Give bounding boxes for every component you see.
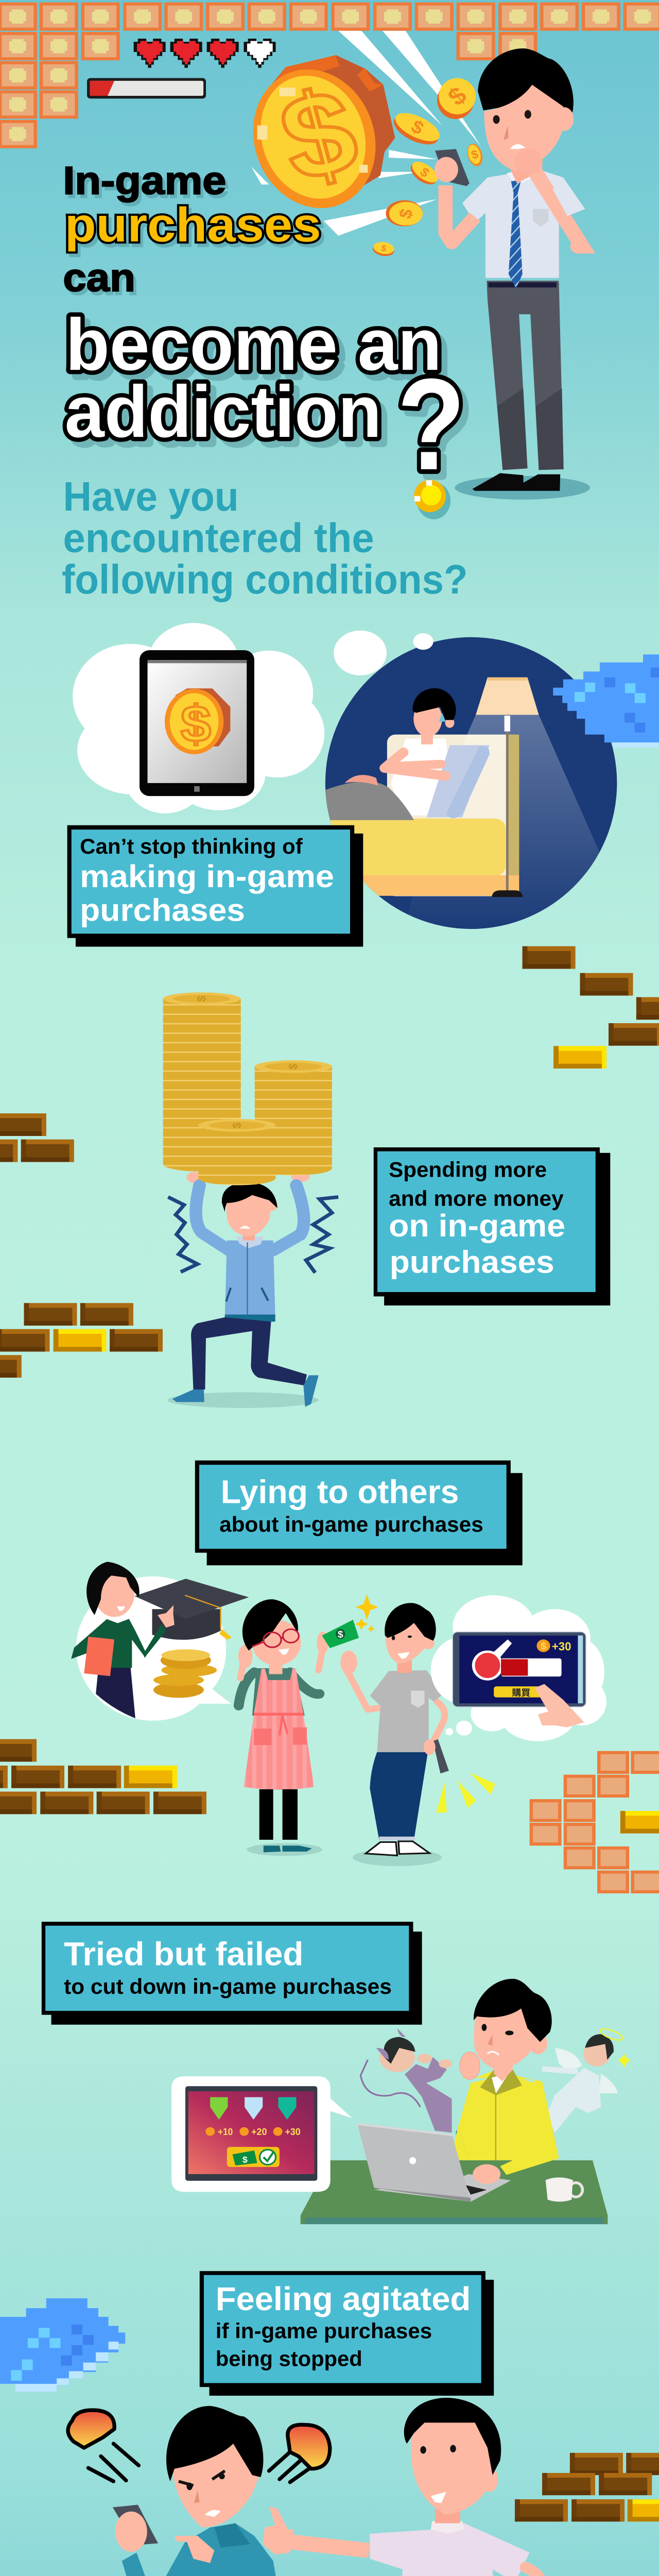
shadow [247, 1843, 322, 1856]
torso [225, 1241, 275, 1317]
chair back [456, 2131, 552, 2162]
icon: tablet with coin [140, 650, 254, 796]
phone [435, 149, 470, 186]
subtitle: Have you [63, 474, 239, 519]
arm to mouth [534, 170, 582, 246]
progress bar [501, 1658, 562, 1676]
floor shadow [167, 1392, 319, 1408]
sleeve [552, 177, 585, 216]
caption 5 [200, 2271, 494, 2396]
nose [504, 125, 509, 140]
icon: life bar [87, 78, 206, 98]
tee [370, 1670, 443, 1753]
belt [489, 282, 557, 287]
angel body [546, 2067, 601, 2133]
neck [509, 156, 542, 183]
section 1: can't stop thinking [0, 623, 659, 1162]
tie [509, 180, 523, 289]
icon: big pixel coin [237, 55, 395, 221]
coin 4 [407, 158, 442, 189]
eyes [392, 1635, 395, 1640]
angel sparkles [618, 2054, 630, 2067]
caption 1: making in-game [80, 859, 334, 894]
jacket cuff [500, 2143, 559, 2175]
mouth [431, 2492, 446, 2503]
apron [244, 1669, 314, 1790]
coin 5: $ [395, 207, 417, 221]
caption 5: Feeling agitated [216, 2281, 471, 2317]
desk [301, 2160, 608, 2224]
pockets [226, 1287, 268, 1301]
brows and eyes [179, 2471, 225, 2485]
apron tie [254, 1713, 303, 1716]
man hair [413, 688, 456, 720]
phone [113, 2505, 158, 2545]
teacher face [94, 1570, 134, 1617]
nose [488, 2034, 493, 2046]
collar [235, 1236, 264, 1248]
coin 3 [465, 142, 485, 168]
zip [495, 2093, 496, 2160]
top [252, 1668, 305, 1716]
character: angry son [113, 2406, 283, 2576]
caption 1 [67, 825, 363, 947]
sofa back [387, 735, 519, 896]
section 2: spending more [0, 992, 659, 1893]
section 5: feeling agitated and debts [0, 2398, 659, 2576]
jeans [370, 1752, 428, 1840]
game tablet: 購買 [512, 1688, 530, 1698]
coin 6: $ [380, 243, 387, 253]
trousers [487, 281, 564, 470]
icon: blue pixel cloud left [0, 2298, 125, 2392]
shoes [172, 1375, 319, 1407]
pockets [254, 1728, 271, 1745]
mouth [510, 144, 525, 149]
confirm button [227, 2147, 280, 2167]
game tablet [453, 1632, 586, 1707]
devil horn [376, 2028, 406, 2060]
hands [186, 1172, 202, 1183]
title line: addiction: addiction [65, 371, 381, 453]
ear [529, 2032, 547, 2054]
caption 4: to cut down in-game purchases [64, 1975, 392, 1999]
stack left [163, 992, 241, 1172]
sofa seat [324, 819, 506, 876]
caption 2: and more money [389, 1187, 564, 1211]
title [63, 158, 465, 497]
bricks right bottom [515, 2453, 659, 2521]
title line: purchases: purchases [65, 198, 321, 252]
angel hair [585, 2034, 614, 2060]
lamp shade [476, 677, 539, 715]
cuffs [379, 1837, 397, 1840]
hem [225, 1315, 275, 1321]
sweat [439, 713, 445, 722]
bricks right upper [523, 946, 659, 1069]
coin pile [153, 1649, 217, 1698]
coin 2 [389, 107, 444, 150]
mouth [205, 2510, 221, 2517]
shoes [473, 473, 560, 491]
coin 6 [372, 241, 395, 258]
face [172, 2427, 261, 2528]
character: angry parent [263, 2398, 541, 2576]
icon: dollar bill: $ [338, 1630, 343, 1640]
blocks right [530, 1751, 659, 1893]
hair [404, 2398, 501, 2475]
near arm [445, 185, 475, 243]
smile [397, 1652, 410, 1659]
caption 2: Spending more [389, 1158, 547, 1182]
bricks left middle [0, 1303, 163, 1378]
neck [397, 1656, 412, 1673]
caption 4 [42, 1922, 422, 2025]
teacher hand [158, 1605, 175, 1628]
hand on phone [435, 157, 458, 182]
devil hands [417, 2054, 432, 2063]
subtitle [62, 474, 468, 602]
chin hand [460, 2052, 480, 2079]
halo [599, 2027, 624, 2042]
subtitle: following conditions? [62, 557, 468, 602]
shoes [264, 1845, 312, 1852]
coin 5 [386, 200, 423, 226]
hoodie [122, 2523, 283, 2576]
devil [360, 2028, 452, 2133]
screen [188, 2091, 315, 2174]
caption 3: Lying to others [221, 1473, 459, 1511]
pointing hand [263, 2506, 294, 2555]
game tablet: +30 [552, 1640, 571, 1653]
icon: sparkles [355, 1595, 378, 1632]
game tablet: $ [541, 1641, 546, 1652]
book [84, 1637, 114, 1676]
stack right [255, 1060, 332, 1175]
lower arm [431, 1702, 445, 1747]
sofa base [363, 875, 519, 896]
hand phone [115, 2512, 147, 2552]
blanket [326, 782, 414, 820]
coin rewards [205, 2127, 301, 2138]
bubble [171, 2076, 352, 2192]
caption 4: Tried but failed [64, 1936, 303, 1973]
small thought bubbles [334, 631, 433, 675]
eyes [493, 115, 500, 124]
strain lines [168, 1197, 338, 1273]
face [252, 1620, 301, 1666]
legs [259, 1789, 273, 1840]
man in yellow jacket [449, 1979, 559, 2175]
dark circle scene [324, 637, 617, 934]
mouth [488, 2052, 499, 2055]
hip arm [502, 2567, 541, 2576]
white burst rays [251, 31, 481, 236]
shoes [366, 1841, 429, 1856]
hair [474, 1979, 552, 2042]
icon: anger puff right [269, 2425, 330, 2482]
arms [239, 1672, 319, 1706]
man neck [421, 735, 433, 744]
thought cloud: game [431, 1595, 606, 1741]
character: man lifting coins [167, 1171, 338, 1408]
arms [196, 1185, 304, 1250]
coin rewards: +10 [218, 2127, 233, 2138]
thought cloud [73, 623, 324, 814]
title line: can: can [63, 255, 135, 299]
eyes [482, 2024, 487, 2031]
coin 2: $ [408, 116, 427, 139]
face [386, 1615, 429, 1664]
face [484, 85, 565, 171]
coin 4: $ [417, 165, 432, 180]
shirt [462, 171, 585, 278]
bricks left lower [0, 1739, 206, 1814]
icon: tablet with coin: $ [181, 695, 211, 752]
icon: blue pixel cloud [553, 654, 659, 748]
graduation cap [152, 1609, 221, 1640]
shadow [455, 476, 590, 500]
caption 5: if in-game purchases [216, 2319, 432, 2343]
icon: yellow shine rays [436, 1773, 495, 1813]
scene clipped [325, 688, 599, 907]
neck [243, 1229, 255, 1241]
neck [269, 1663, 283, 1674]
icon: coin stacks [163, 992, 332, 1185]
lamp light [410, 715, 599, 907]
coin 1 [437, 78, 476, 119]
icon: big pixel coin: $ [268, 63, 370, 207]
coffee cup [546, 2177, 582, 2201]
zip [247, 1242, 248, 1315]
subtitle: encountered the [63, 516, 374, 561]
collar [480, 2070, 522, 2095]
neck [435, 2502, 460, 2523]
section 4: tried but failed [0, 1922, 630, 2396]
screen frame [185, 2086, 317, 2181]
stack front [198, 1119, 276, 1185]
speech bubble: game screen [171, 2076, 352, 2192]
devil hair [384, 2037, 415, 2064]
coin reward [536, 1639, 550, 1652]
caption 1: purchases [80, 893, 245, 928]
arm of sofa [509, 735, 519, 891]
hair back [478, 48, 574, 112]
hand tapping [534, 1684, 584, 1727]
face [411, 2418, 496, 2515]
hair [385, 1603, 436, 1640]
teacher hair [86, 1562, 140, 1615]
speech bubble: game screen: $ [242, 2155, 248, 2165]
raised arm [344, 1666, 380, 1709]
nose [194, 2490, 200, 2503]
hand [424, 1739, 436, 1755]
coin 1: $ [443, 82, 472, 111]
phone [433, 1739, 449, 1773]
neck [494, 2054, 513, 2081]
collar [431, 2521, 464, 2534]
night circle [325, 637, 617, 929]
mouth [239, 1226, 251, 1229]
floor shadow [353, 1849, 442, 1866]
coin rewards: +20 [251, 2127, 267, 2138]
shirt [370, 2523, 530, 2576]
hair [166, 2406, 263, 2481]
angel wings [555, 2048, 618, 2093]
teacher skirt [96, 1664, 135, 1718]
eyes [420, 2446, 426, 2454]
coin 3: $ [470, 148, 480, 162]
stack left: $ [195, 995, 209, 1002]
icon: hearts [134, 39, 276, 68]
caption 2: on in-game [389, 1209, 565, 1244]
hands [238, 1645, 253, 1668]
hair [222, 1182, 278, 1212]
caption 3: about in-game purchases [219, 1513, 483, 1537]
glasses [252, 1629, 299, 1647]
title line: become an: become an [65, 304, 442, 386]
icon: small coins [372, 78, 485, 258]
trouser shade [497, 388, 564, 470]
teacher smile [117, 1606, 125, 1611]
pointing hand [175, 2536, 214, 2563]
pocket [411, 1691, 424, 1708]
icon: anger puff left [68, 2410, 138, 2481]
stack front: $ [230, 1122, 244, 1129]
devil robe [405, 2057, 452, 2133]
bubble [76, 1577, 231, 1721]
badge [533, 209, 548, 227]
character: man in grey tee [340, 1603, 449, 1866]
angel face [583, 2041, 610, 2066]
caption 2 [374, 1147, 610, 1306]
man head [413, 707, 442, 736]
title line: In-game: In-game [63, 158, 226, 202]
face [474, 2008, 538, 2070]
potion [492, 1639, 512, 1658]
hair [242, 1599, 298, 1651]
caption 5: being stopped [216, 2347, 362, 2371]
stack right: $ [286, 1063, 300, 1070]
icon: dollar bill [322, 1620, 359, 1648]
hood [214, 2523, 250, 2548]
title question mark: ? [397, 352, 465, 497]
legs [191, 1317, 307, 1389]
character: mother with apron [238, 1599, 328, 1856]
smile [278, 1649, 289, 1655]
buy button [494, 1686, 544, 1698]
angel [542, 2027, 630, 2133]
pillow [427, 745, 490, 817]
angel arms [542, 2069, 578, 2072]
head [226, 1190, 273, 1236]
speech bubble: teacher [74, 1562, 249, 1721]
devil tail [360, 2060, 420, 2107]
man arms [385, 752, 445, 776]
icon: question dot coin [414, 480, 450, 519]
hand at mouth [515, 148, 543, 175]
bricks left upper [0, 1113, 74, 1162]
block row top and left [0, 3, 659, 148]
character: student with phone [435, 48, 590, 500]
pixel cloud sparkles [575, 668, 659, 748]
man body [391, 738, 452, 816]
lamp pole [506, 731, 509, 890]
section: hero [0, 3, 659, 602]
typing hand [473, 2164, 500, 2184]
pointing arm [273, 2540, 369, 2550]
collar [507, 167, 542, 185]
laptop [357, 2123, 511, 2201]
ok hand [340, 1651, 357, 1674]
caption 2: purchases [390, 1245, 554, 1280]
teacher blouse [74, 1621, 164, 1666]
coin rewards: +30 [285, 2127, 301, 2138]
caption 3 [195, 1461, 523, 1565]
gems [210, 2097, 228, 2120]
caption 1: Can’t stop thinking of [80, 835, 303, 859]
devil face [379, 2044, 415, 2072]
ear [555, 107, 574, 131]
foot [344, 775, 378, 786]
jacket [449, 2070, 559, 2175]
